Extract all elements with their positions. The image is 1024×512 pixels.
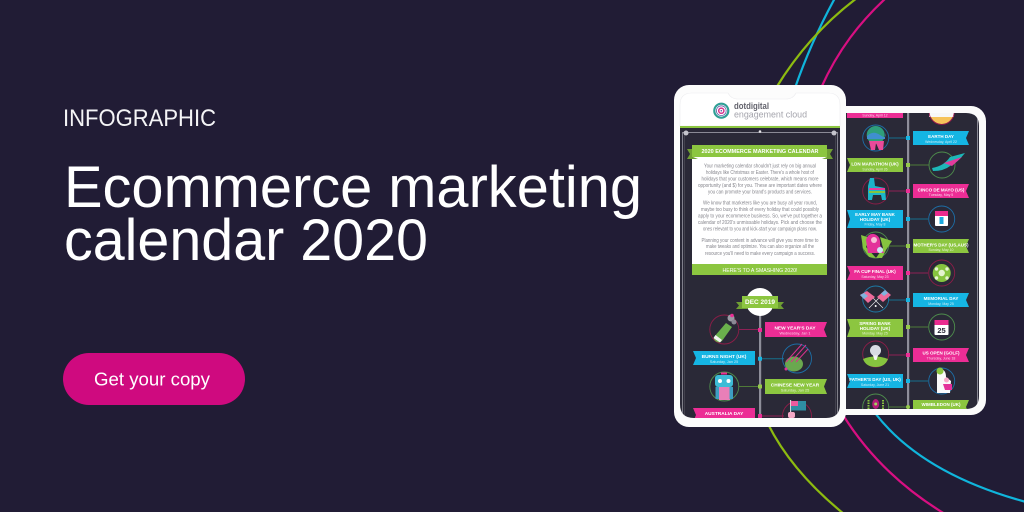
entry: Spring bank holiday: Monday, May 25 <box>862 332 888 336</box>
entry: Father's Day: FATHER'S DAY (US, UK) <box>849 377 901 382</box>
entry: Memorial Day: Monday, May 25 <box>928 302 954 306</box>
banner: smashing 2020: HERE'S TO A SMASHING 2020! <box>722 268 798 274</box>
entry: US Open: US OPEN (GOLF) <box>922 350 960 356</box>
entry: Chinese New Year: Saturday, Jan 25 <box>781 388 809 392</box>
entry: Mother's Day: Sunday, May 10 <box>928 248 954 252</box>
intro paragraphs: make tweaks and optimize. You can also organize all the <box>706 244 814 250</box>
badge: Dec 2019: DEC 2019 <box>745 300 776 306</box>
banner: calendar title: 2020 ECOMMERCE MARKETING CALENDAR <box>702 149 819 155</box>
entry: New Year's Day: NEW YEAR'S DAY <box>774 326 816 332</box>
entry: Cinco de Mayo: CINCO DE MAYO (US) <box>918 188 965 192</box>
entry: Australia Day: AUSTRALIA DAY <box>705 411 744 417</box>
entry: top cropped <box>847 113 954 125</box>
main title: calendar 2020 <box>64 208 428 273</box>
entry: Australia Day <box>693 400 812 418</box>
decorative curves <box>768 0 1024 512</box>
entry: US Open: Thursday, June 18 <box>927 356 955 360</box>
entry: FA Cup Final: Saturday, May 23 <box>861 275 889 279</box>
intro paragraphs: resource you'll need to make every campaign a success. <box>705 251 815 257</box>
entry: Burns Night <box>693 344 812 373</box>
intro paragraphs: maybe too busy to think of every holiday that could possibly <box>701 207 819 213</box>
entry: Spring bank holiday <box>847 314 955 340</box>
logo text <box>734 101 807 120</box>
entry: FA Cup Final: FA CUP FINAL (UK) <box>854 269 896 274</box>
entry: London Marathon: LDN MARATHON (UK) <box>851 162 899 166</box>
entry: FA Cup Final <box>847 260 955 286</box>
banner: calendar title <box>687 145 833 159</box>
intro paragraphs: Planning your content in advance will give you more time to <box>702 238 819 244</box>
entry: Cinco de Mayo: Tuesday, May 5 <box>929 193 953 197</box>
logo icon <box>714 104 728 118</box>
intro paragraphs <box>698 164 822 257</box>
entry: Chinese New Year <box>710 372 827 401</box>
front phone <box>674 85 846 430</box>
entry: Earth Day: Wednesday, April 22 <box>925 140 957 144</box>
entry: Memorial Day <box>860 286 969 312</box>
entry: Early May bank holiday: Friday, May 8 <box>865 222 886 226</box>
button: get your copy <box>63 353 245 405</box>
entry: New Year's Day: Wednesday, Jan 1 <box>779 332 811 336</box>
intro paragraphs: opportunity (and $) for you. These are important dates where <box>698 183 822 189</box>
entry: Wimbledon: WIMBLEDON (UK) <box>922 402 961 407</box>
entry: Spring bank holiday: SPRING BANK <box>859 321 891 326</box>
entry: Early May bank holiday <box>847 206 955 232</box>
entry: Mother's Day <box>861 232 969 258</box>
intro paragraphs: calendar of 2020's unmissable holidays. Pick and choose the <box>698 220 822 226</box>
entry: Chinese New Year: CHINESE NEW YEAR <box>771 382 820 388</box>
entry: London Marathon <box>847 152 965 178</box>
entry: Father's Day: Saturday, June 21 <box>861 383 889 387</box>
logo text: dotdigital <box>734 101 769 112</box>
entry: Spring bank holiday: HOLIDAY (UK) <box>860 326 891 331</box>
entry: top cropped: Sunday, April 12 <box>862 114 888 118</box>
left heading: category label: INFOGRAPHIC <box>63 105 216 132</box>
main title: Ecommerce marketing <box>64 155 642 220</box>
intro paragraphs: ones relevant to you and kick-start your campaign plans now. <box>703 226 817 232</box>
entry: Mother's Day: MOTHER'S DAY (US,AUS) <box>913 242 969 248</box>
entry: Early May bank holiday: EARLY MAY BANK <box>855 212 896 217</box>
entry: Burns Night: Saturday, Jan 25 <box>710 360 738 364</box>
entry: Memorial Day: MEMORIAL DAY <box>924 296 958 301</box>
entry: New Year's Day <box>710 314 827 344</box>
back phone <box>846 106 986 415</box>
intro paragraphs: holidays like Christmas or Easter. There's a whole host of <box>706 170 815 176</box>
entry: Earth Day: EARTH DAY <box>928 134 954 139</box>
entry: London Marathon: Sunday, April 26 <box>862 168 888 172</box>
button: get your copy: Get your copy <box>94 370 210 390</box>
intro paragraphs: Your marketing calendar shouldn't just rely on big annual <box>704 164 816 170</box>
entry: Cinco de Mayo <box>863 178 969 204</box>
phone header with logo <box>680 93 840 126</box>
entry: Father's Day <box>847 368 955 394</box>
phone screen <box>680 126 840 430</box>
entry: Spring bank holiday: 25 <box>937 326 946 335</box>
intro paragraphs: We know that marketers like you are busy all year round, <box>703 200 817 206</box>
intro paragraphs: you can promote your brand's products and services. <box>708 190 812 196</box>
intro text panel <box>687 145 833 275</box>
entry: Early May bank holiday: HOLIDAY (UK) <box>860 217 891 222</box>
banner: smashing 2020 <box>692 264 827 275</box>
badge: Dec 2019 <box>736 288 784 316</box>
entry: US Open <box>863 341 969 367</box>
intro paragraphs: apply to your ecommerce business. So, we've put together a <box>698 214 822 220</box>
intro paragraphs: holidays that your customers celebrate, which means more <box>702 177 819 183</box>
entry: Burns Night: BURNS NIGHT (UK) <box>702 354 747 360</box>
entry: Earth Day <box>863 125 969 151</box>
logo text: engagement cloud <box>734 110 807 120</box>
entry: Wimbledon <box>862 394 969 409</box>
main title <box>64 155 642 273</box>
